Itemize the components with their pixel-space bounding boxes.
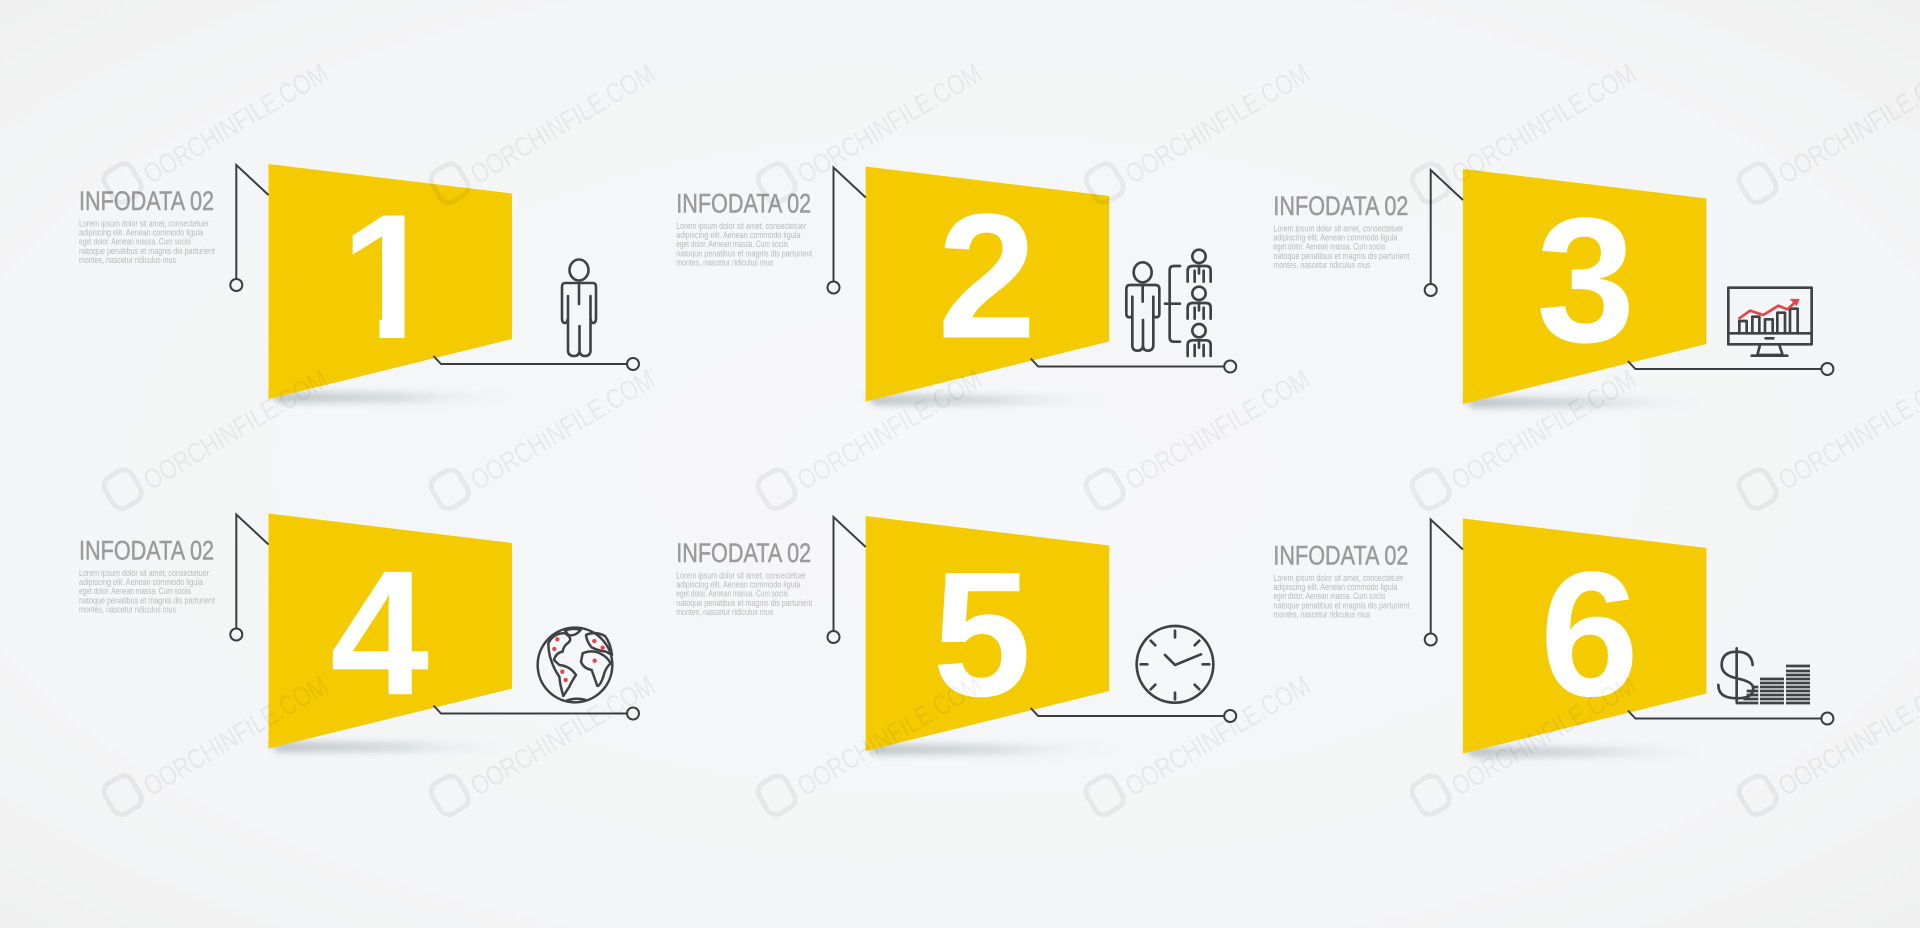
- body text 6: natoque penatibus et magnis dis parturient: [1273, 600, 1410, 610]
- heading 6: INFODATA 02: [1273, 540, 1408, 570]
- body text 1: natoque penatibus et magnis dis parturient: [79, 246, 215, 256]
- node top 5: [828, 631, 840, 643]
- watermark: OORCHINFILE.COM: [792, 57, 987, 190]
- icon: clock: [1137, 626, 1213, 703]
- body text 6: adipiscing elit. Aenean commodo ligula: [1273, 582, 1397, 592]
- watermark: OORCHINFILE.COM: [792, 363, 987, 496]
- yellow panel 4: [268, 514, 512, 748]
- heading 1: INFODATA 02: [79, 186, 214, 216]
- icon: person: [562, 260, 596, 356]
- heading 5: INFODATA 02: [676, 538, 811, 568]
- watermark: OORCHINFILE.COM: [138, 57, 333, 190]
- watermark: OORCHINFILE.COM: [1446, 669, 1641, 802]
- body text 2: [676, 221, 813, 268]
- leader bottom 2: [1031, 358, 1224, 366]
- node top 4: [230, 628, 242, 640]
- leader top 5: [834, 517, 866, 631]
- body text 2: adipiscing elit. Aenean commodo ligula: [676, 230, 800, 240]
- body text 2: montes, nascetur ridiculus mus: [676, 258, 774, 268]
- body text 6: eget dolor. Aenean massa. Cum sociis: [1273, 591, 1386, 601]
- leader top 2: [834, 168, 866, 282]
- shadow 2: [865, 394, 1122, 406]
- watermark: OORCHINFILE.COM: [792, 669, 987, 802]
- node top 1: [230, 279, 242, 291]
- body text 3: adipiscing elit. Aenean commodo ligula: [1273, 232, 1397, 242]
- leader bottom 5: [1031, 708, 1224, 716]
- leader bottom 4: [434, 706, 627, 714]
- body text 1: eget dolor. Aenean massa. Cum sociis: [79, 237, 191, 247]
- node bottom 4: [627, 708, 639, 720]
- icon: globe: [538, 628, 612, 702]
- shadow 5: [865, 744, 1122, 755]
- number 5: 5: [932, 534, 1032, 734]
- body text 5: montes, nascetur ridiculus mus: [676, 607, 774, 617]
- watermark: OORCHINFILE.COM: [1120, 57, 1315, 190]
- step 1 card: [79, 164, 639, 403]
- watermark: OORCHINFILE.COM: [1446, 57, 1641, 190]
- body text 1: Lorem ipsum dolor sit amet, consectetuer: [79, 218, 209, 228]
- heading 2: INFODATA 02: [676, 188, 811, 218]
- leader top 4: [236, 514, 268, 628]
- body text 1: [79, 218, 215, 265]
- leader top 3: [1431, 170, 1463, 284]
- node bottom 5: [1224, 710, 1236, 722]
- watermark: OORCHINFILE.COM: [138, 363, 333, 496]
- body text 5: Lorem ipsum dolor sit amet, consectetuer: [676, 570, 806, 580]
- heading 3: INFODATA 02: [1273, 191, 1408, 221]
- body text 4: montes, nascetur ridiculus mus: [79, 604, 176, 614]
- yellow panel 1: [268, 164, 512, 399]
- body text 6: montes, nascetur ridiculus mus: [1273, 610, 1371, 620]
- step 5 card: [676, 516, 1236, 755]
- icon: monitor with chart: [1728, 288, 1812, 356]
- body text 3: montes, nascetur ridiculus mus: [1273, 260, 1371, 270]
- yellow panel 3: [1463, 169, 1706, 404]
- body text 5: eget dolor. Aenean massa. Cum sociis: [676, 589, 789, 599]
- watermark: OORCHINFILE.COM: [138, 669, 333, 802]
- node top 6: [1425, 634, 1437, 646]
- watermark: OORCHINFILE.COM: [465, 363, 660, 496]
- shadow 4: [268, 742, 525, 752]
- watermark: OORCHINFILE.COM: [1120, 669, 1315, 802]
- body text 4: natoque penatibus et magnis dis parturient: [79, 596, 215, 606]
- watermark: OORCHINFILE.COM: [1120, 363, 1315, 496]
- body text 5: natoque penatibus et magnis dis parturient: [676, 598, 813, 608]
- step 6 card: [1273, 518, 1833, 758]
- number 3: 3: [1536, 180, 1635, 380]
- body text 6: [1273, 573, 1410, 620]
- watermark: OORCHINFILE.COM: [465, 57, 660, 190]
- body text 5: adipiscing elit. Aenean commodo ligula: [676, 580, 800, 590]
- icon: dollar and coin stacks: [1718, 648, 1810, 703]
- yellow panel 5: [866, 516, 1109, 751]
- body text 3: Lorem ipsum dolor sit amet, consectetuer: [1273, 223, 1403, 233]
- node bottom 1: [627, 358, 639, 370]
- body text 4: Lorem ipsum dolor sit amet, consectetuer: [79, 568, 209, 578]
- body text 1: montes, nascetur ridiculus mus: [79, 255, 176, 265]
- leader top 6: [1431, 520, 1463, 634]
- number 2: 2: [937, 176, 1036, 376]
- body text 3: natoque penatibus et magnis dis parturient: [1273, 251, 1410, 261]
- node bottom 3: [1821, 363, 1833, 375]
- node top 2: [828, 282, 840, 294]
- body text 4: eget dolor. Aenean massa. Cum sociis: [79, 586, 191, 596]
- body text 2: Lorem ipsum dolor sit amet, consectetuer: [676, 221, 806, 231]
- body text 6: Lorem ipsum dolor sit amet, consectetuer: [1273, 573, 1403, 583]
- yellow panel 6: [1463, 518, 1706, 754]
- number 1: 1: [340, 177, 440, 376]
- watermark: OORCHINFILE.COM: [465, 669, 660, 802]
- body text 5: [676, 570, 813, 617]
- body text 3: eget dolor. Aenean massa. Cum sociis: [1273, 242, 1386, 252]
- body text 2: natoque penatibus et magnis dis parturient: [676, 248, 813, 258]
- body text 2: eget dolor. Aenean massa. Cum sociis: [676, 239, 789, 249]
- leader bottom 6: [1628, 710, 1821, 718]
- body text 3: [1273, 223, 1410, 270]
- leader bottom 3: [1628, 361, 1821, 369]
- number 6: 6: [1540, 534, 1639, 734]
- shadow 6: [1462, 746, 1719, 758]
- node top 3: [1425, 284, 1437, 296]
- shadow 1: [268, 392, 525, 403]
- node bottom 2: [1224, 360, 1236, 372]
- heading 4: INFODATA 02: [79, 536, 214, 566]
- watermark: [100, 51, 1920, 822]
- watermark: OORCHINFILE.COM: [1446, 363, 1641, 496]
- icon: team hierarchy: [1126, 250, 1211, 356]
- node bottom 6: [1821, 712, 1833, 724]
- shadow 3: [1462, 397, 1719, 408]
- step 3 card: [1273, 169, 1833, 408]
- body text 1: adipiscing elit. Aenean commodo ligula: [79, 228, 203, 238]
- body text 4: [79, 568, 215, 614]
- step 2 card: [676, 166, 1236, 406]
- body text 4: adipiscing elit. Aenean commodo ligula: [79, 577, 203, 587]
- number 4: 4: [330, 533, 429, 732]
- leader top 1: [236, 165, 268, 279]
- step 4 card: [79, 514, 639, 752]
- yellow panel 2: [866, 166, 1109, 402]
- leader bottom 1: [434, 356, 627, 364]
